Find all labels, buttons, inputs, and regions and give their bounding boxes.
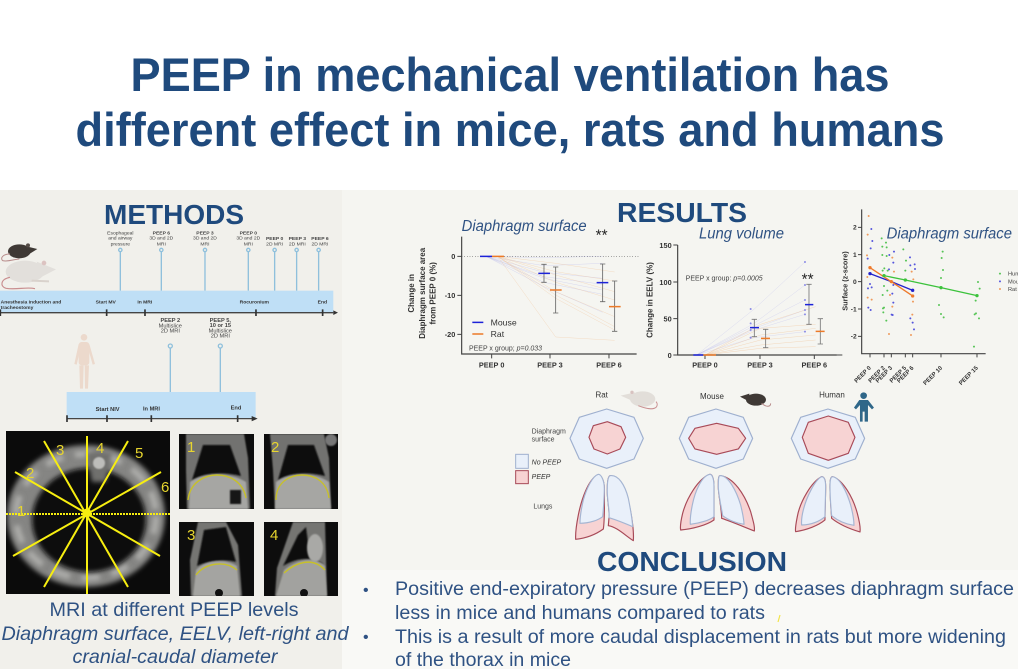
- chart: diaphragm surface z-score: PEEP 0: [854, 365, 873, 384]
- chart: diaphragm surface z-score: Diaphragm surface: [887, 226, 1012, 243]
- diagram: species comparison: Human: [819, 391, 845, 400]
- timeline: animal protocol: Anesthesia induction and: [1, 300, 61, 306]
- icon: human small: [854, 392, 874, 422]
- chart: lung volume change: Change in EELV (%): [646, 262, 655, 338]
- chart: diaphragm surface z-score: Surface (z-score): [840, 251, 849, 311]
- chart: diaphragm surface change: PEEP 0: [479, 361, 504, 370]
- image: axial MRI with radial lines: 2: [26, 465, 34, 482]
- panel: methods: [0, 190, 350, 669]
- text block: conclusion bullets: •: [363, 629, 369, 646]
- legend: PEEP: [532, 474, 551, 481]
- chart: lung volume change: **: [802, 272, 814, 289]
- chart: diaphragm surface change: [407, 218, 640, 370]
- chart: lung volume change: PEEP 0: [692, 361, 718, 370]
- green scatter: [881, 237, 1001, 348]
- image: coronal MRI 2: 2: [271, 439, 279, 456]
- chart: diaphragm surface z-score: Rat: [1008, 287, 1017, 293]
- chart: diaphragm surface z-score: 1: [853, 252, 857, 259]
- text block: conclusion bullets: This is a result of more caudal displacement in rats but more widening: [395, 627, 1006, 648]
- heading: results: RESULTS: [617, 197, 747, 228]
- diaphragm: rat: [570, 409, 643, 468]
- panel: right background: [342, 190, 1018, 669]
- blue scatter: [867, 228, 1001, 330]
- chart: diaphragm surface change: from PEEP 0 (%): [429, 262, 438, 325]
- image: sagittal MRI 4: [264, 522, 338, 597]
- timeline: human protocol: [67, 318, 258, 422]
- timeline: animal protocol: pressure: [111, 241, 130, 247]
- text block: conclusion bullets: [363, 579, 1014, 669]
- image: coronal MRI 1: 1: [187, 439, 195, 456]
- timeline: human protocol: PEEP 2: [160, 318, 180, 324]
- icon: mouse small: [740, 394, 771, 406]
- chart: diaphragm surface change: PEEP 3: [537, 361, 563, 370]
- chart: diaphragm surface z-score: PEEP 2: [868, 365, 887, 384]
- timeline: animal protocol: [0, 231, 338, 316]
- chart: diaphragm surface change: Diaphragm surface area: [418, 247, 427, 339]
- timeline: animal protocol: PEEP 0: [240, 231, 257, 237]
- timeline: animal protocol: 3D and 2D: [149, 236, 174, 242]
- heading: conclusion: CONCLUSION: [597, 546, 787, 577]
- chart: diaphragm surface change: -20: [445, 330, 455, 339]
- chart: lung volume change: PEEP 6: [802, 361, 827, 370]
- image: axial MRI with radial lines: 6: [161, 479, 169, 496]
- image: axial MRI with radial lines: 1: [17, 503, 25, 520]
- chart: diaphragm surface z-score: [830, 209, 1018, 387]
- chart: lung volume change: PEEP 3: [747, 361, 773, 370]
- chart: diaphragm surface change: 0: [451, 252, 455, 261]
- title: [76, 48, 944, 156]
- chart: diaphragm surface z-score: PEEP 10: [923, 365, 945, 387]
- image: sagittal MRI 4: 4: [270, 527, 278, 544]
- timeline: animal protocol: Rocuronium: [240, 300, 270, 306]
- text block: conclusion bullets: less in mice and humans compared to rats: [395, 603, 765, 624]
- chart: diaphragm surface z-score: 0: [853, 279, 857, 286]
- lungs: rat: [576, 474, 633, 541]
- diagram: species comparison: surface: [532, 437, 555, 444]
- timeline: animal protocol: MRI: [200, 241, 210, 247]
- timeline: human protocol: 10 or 15: [210, 323, 231, 329]
- diagram: species comparison: Mouse: [700, 392, 725, 401]
- chart: diaphragm surface change: Diaphragm surface: [462, 218, 587, 235]
- title: different effect in mice, rats and humans: [76, 103, 944, 156]
- timeline: human protocol: Multislice: [209, 328, 232, 334]
- lungs: mouse: [680, 474, 754, 531]
- chart: lung volume change: Lung volume: [699, 225, 784, 242]
- timeline: human protocol: End: [231, 405, 242, 411]
- trend lines: [870, 268, 977, 296]
- timeline: animal protocol: 2D MRI: [289, 241, 306, 247]
- caption: MRI: [2, 599, 350, 668]
- chart: diaphragm surface z-score: 2: [853, 225, 857, 232]
- caption: MRI: MRI at different PEEP levels: [50, 599, 299, 621]
- legend: [516, 454, 562, 484]
- image: axial MRI with radial lines: 3: [56, 442, 64, 459]
- icon: rat: [2, 261, 56, 289]
- timeline: animal protocol: 2D MRI: [266, 241, 283, 247]
- error bars: [541, 264, 617, 331]
- title: PEEP in mechanical ventilation has: [130, 48, 890, 101]
- timeline: human protocol: 2D MRI: [211, 334, 230, 340]
- text block: conclusion bullets: •: [363, 582, 369, 599]
- timeline: animal protocol: Esophageal: [107, 231, 133, 237]
- timeline: animal protocol: PEEP 6: [311, 236, 329, 242]
- image: coronal MRI 1: [179, 434, 254, 509]
- chart: diaphragm surface z-score: PEEP 15: [958, 365, 980, 387]
- chart: diaphragm surface z-score: -2: [851, 334, 857, 341]
- timeline: animal protocol: tracheostomy: [1, 305, 34, 311]
- diagram: species comparison: Rat: [595, 391, 609, 400]
- chart: diaphragm surface z-score: PEEP 5: [889, 365, 909, 384]
- chart: lung volume change: 150: [659, 241, 672, 250]
- diagram: species comparison: [516, 391, 874, 541]
- timeline: human protocol: Start NIV: [96, 407, 120, 413]
- timeline: human protocol: Multislice: [159, 323, 182, 329]
- timeline: animal protocol: Start MV: [96, 300, 117, 306]
- chart: lung volume change: PEEP x group: p=0.0005: [686, 276, 763, 283]
- timeline: animal protocol: 3D and 2D: [193, 236, 217, 242]
- icon: human figure: [74, 334, 95, 389]
- chart: diaphragm surface z-score: -1: [851, 306, 857, 313]
- heading: methods: METHODS: [104, 199, 244, 230]
- lungs: human: [795, 477, 860, 532]
- chart: diaphragm surface z-score: PEEP 3: [875, 365, 895, 384]
- timeline: animal protocol: MRI: [244, 241, 253, 247]
- timeline: human protocol: 2D MRI: [161, 329, 180, 335]
- caption: MRI: cranial-caudal diameter: [72, 647, 278, 668]
- diaphragm: human: [791, 409, 865, 468]
- diagram: species comparison: Diaphragm: [532, 428, 566, 435]
- timeline: animal protocol: 3D and 2D: [236, 236, 261, 242]
- image: sagittal MRI 3: [179, 522, 254, 597]
- chart: diaphragm surface change: **: [596, 228, 608, 245]
- timeline: animal protocol: PEEP 6: [153, 231, 170, 237]
- chart: lung volume change: 100: [659, 278, 672, 287]
- chart: diaphragm surface z-score: PEEP 6: [896, 365, 916, 384]
- caption: MRI: Diaphragm surface, EELV, left-right and: [2, 624, 350, 645]
- timeline: human protocol: PEEP 5,: [210, 318, 231, 324]
- icon: mouse: [2, 243, 37, 261]
- orange scatter: [866, 215, 1001, 336]
- image: axial MRI with radial lines: 5: [135, 445, 143, 462]
- chart: lung volume change: 0: [668, 351, 672, 360]
- timeline: animal protocol: In MRI: [137, 300, 153, 306]
- image: coronal MRI 2: [264, 434, 338, 509]
- diaphragm: mouse: [679, 409, 753, 468]
- text block: conclusion bullets: Positive end-expiratory pressure (PEEP) decreases diaphragm surface: [395, 579, 1014, 600]
- timeline: human protocol: In MRI: [143, 407, 160, 413]
- timeline: animal protocol: and airway: [108, 236, 133, 242]
- legend: No PEEP: [532, 459, 562, 466]
- chart: lung volume change: [646, 225, 837, 370]
- individual mouse lines: [486, 256, 603, 312]
- timeline: animal protocol: PEEP 3: [289, 236, 306, 242]
- image: sagittal MRI 3: 3: [187, 527, 195, 544]
- mark: yellow tick: [778, 615, 780, 622]
- diagram: species comparison: Lungs: [533, 504, 553, 511]
- chart: diaphragm surface change: Mouse: [491, 317, 517, 327]
- panel: conclusion background: [342, 570, 1018, 669]
- timeline: animal protocol: 2D MRI: [312, 241, 328, 247]
- timeline: animal protocol: PEEP 3: [196, 231, 214, 237]
- image: axial MRI with radial lines: 4: [96, 440, 104, 457]
- image: axial MRI with radial lines: [6, 431, 170, 594]
- chart: diaphragm surface change: Rat: [491, 329, 505, 339]
- chart: diaphragm surface change: -10: [445, 291, 455, 300]
- individual rat lines: [498, 256, 615, 340]
- chart: diaphragm surface change: PEEP x group; p=0.033: [469, 346, 542, 353]
- mean markers: [472, 256, 621, 334]
- timeline: animal protocol: MRI: [157, 241, 166, 247]
- chart: lung volume change: 50: [664, 315, 672, 324]
- icon: rat small: [621, 391, 657, 409]
- chart: diaphragm surface change: Change in: [407, 274, 416, 313]
- timeline: animal protocol: End: [318, 300, 327, 306]
- timeline: animal protocol: PEEP 0: [266, 236, 284, 242]
- chart: diaphragm surface change: PEEP 6: [596, 361, 622, 370]
